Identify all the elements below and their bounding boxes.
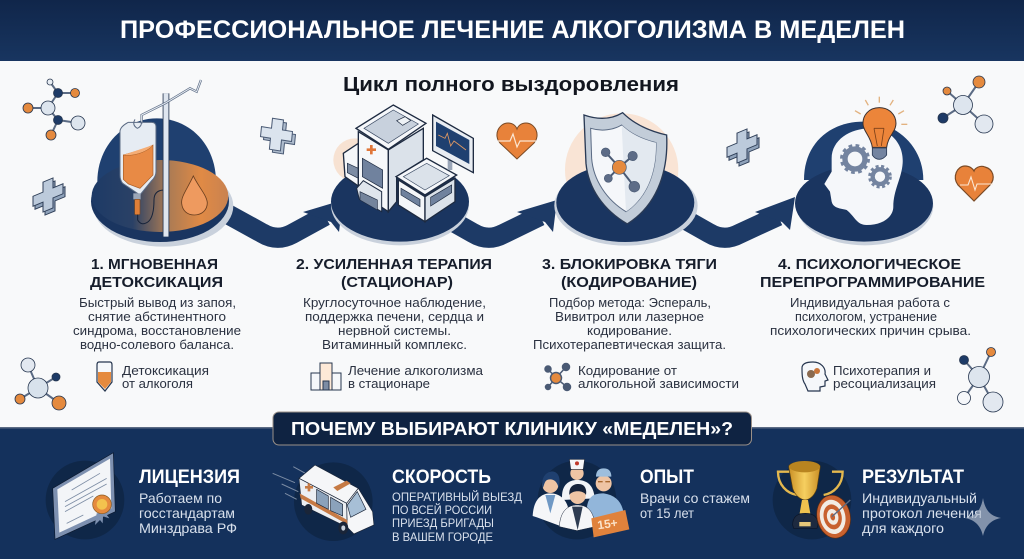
panel: why choose bbox=[0, 427, 1024, 559]
icon: target bbox=[813, 492, 854, 541]
text: step 3 description bbox=[533, 295, 726, 352]
badge: why choose heading: ПОЧЕМУ ВЫБИРАЮТ КЛИНИКУ «МЕДЕЛЕН»? bbox=[291, 419, 733, 439]
step 3 text bbox=[533, 256, 739, 391]
icon: plus centre-left bbox=[259, 117, 296, 156]
illustration: step 1 IV drip bbox=[91, 80, 233, 247]
text: speed: ОПЕРАТИВНЫЙ ВЫЕЗД bbox=[392, 489, 522, 504]
heading: step 3: (КОДИРОВАНИЕ) bbox=[561, 274, 697, 291]
step 2 text bbox=[296, 256, 492, 391]
heading: step 1: 1. МГНОВЕННАЯ bbox=[91, 256, 218, 273]
icon: ambulance bbox=[273, 462, 374, 541]
icon: molecule bottom right bbox=[958, 348, 1003, 412]
icon: molecule on shield bbox=[601, 148, 640, 192]
heading: step 3: 3. БЛОКИРОВКА ТЯГИ bbox=[542, 256, 717, 273]
text: speed: СКОРОСТЬ bbox=[392, 467, 491, 488]
icon: licence certificate bbox=[46, 453, 124, 539]
icon: IV bag bbox=[120, 122, 156, 195]
illustration: step 3 shield bbox=[554, 113, 698, 246]
text: step 3 description: Подбор метода: Эспераль, bbox=[549, 295, 711, 310]
icon: small molecule bbox=[545, 364, 570, 390]
text: step 3 description: Вивитрол или лазерное bbox=[555, 309, 704, 324]
icon: orange drop bbox=[182, 176, 207, 215]
text: experience: ОПЫТ bbox=[640, 467, 694, 488]
text: step 2 caption bbox=[348, 363, 484, 391]
step 1 text bbox=[73, 256, 241, 391]
icon: molecule top left bbox=[23, 79, 85, 140]
text: experience: от 15 лет bbox=[640, 505, 695, 521]
illustration: step 2 hospital bbox=[331, 105, 473, 245]
text: step 1 description: водно-солевого баланса. bbox=[80, 337, 234, 352]
text: step 2 description bbox=[303, 295, 486, 352]
text: licence: Минздрава РФ bbox=[139, 520, 237, 536]
text: step 4 description bbox=[770, 295, 971, 338]
text: speed: ПО ВСЕЙ РОССИИ bbox=[392, 502, 492, 517]
text: step 3 caption: Кодирование от bbox=[578, 363, 677, 378]
text: step 4 description: психологом, устранение bbox=[795, 309, 937, 324]
icon: IV pole bbox=[156, 93, 176, 237]
text: step 1 caption: Детоксикация bbox=[122, 363, 209, 378]
text: result: для каждого bbox=[862, 520, 944, 536]
icon: heart centre bbox=[497, 123, 537, 159]
text: step 2 caption: в стационаре bbox=[348, 376, 430, 391]
text: step 3 caption bbox=[578, 363, 739, 391]
text: step 1 caption: от алкоголя bbox=[122, 376, 193, 391]
text: step 3 caption: алкогольной зависимости bbox=[578, 376, 739, 391]
text: licence bbox=[139, 467, 240, 536]
icon: light bulb bbox=[855, 97, 907, 159]
text: step 1 description: Быстрый вывод из запоя, bbox=[79, 295, 236, 310]
text: step 2 description: поддержка печени, сердца и bbox=[305, 309, 484, 324]
text: step 4 caption bbox=[833, 363, 936, 391]
heading: step 2: 2. УСИЛЕННАЯ ТЕРАПИЯ bbox=[296, 256, 492, 273]
badge: 15+: 15+ bbox=[596, 516, 619, 532]
icon: plus left bbox=[33, 174, 65, 219]
icon: molecule bottom left bbox=[15, 358, 66, 410]
text: step 4 caption: ресоциализация bbox=[833, 376, 936, 391]
icon: molecule top right bbox=[938, 76, 993, 133]
text: step 4 description: психологических причин срыва. bbox=[770, 323, 971, 338]
text: step 1 caption bbox=[122, 363, 209, 391]
text: speed: В ВАШЕМ ГОРОДЕ bbox=[392, 530, 493, 544]
text: result: РЕЗУЛЬТАТ bbox=[862, 467, 964, 488]
text: step 1 description: снятие абстинентного bbox=[88, 309, 226, 324]
text: speed bbox=[392, 467, 522, 544]
icon: sparkle star bbox=[965, 498, 1001, 536]
text: step 2 caption: Лечение алкоголизма bbox=[348, 363, 484, 378]
icon: gears bbox=[842, 146, 890, 187]
text: step 2 description: Круглосуточное наблюдение, bbox=[303, 295, 486, 310]
heading: step 1: ДЕТОКСИКАЦИЯ bbox=[90, 274, 223, 291]
icon: heart right bbox=[955, 166, 993, 201]
header banner bbox=[0, 0, 1024, 61]
text: licence: Работаем по bbox=[139, 490, 222, 506]
arrow: step 1 to step 2 bbox=[222, 200, 343, 238]
icon: doctors team bbox=[533, 459, 629, 539]
text: licence: ЛИЦЕНЗИЯ bbox=[139, 467, 240, 488]
text: step 4 description: Индивидуальная работа с bbox=[790, 295, 950, 310]
text: step 2 description: нервной системы. bbox=[338, 323, 451, 338]
text: step 1 description: синдрома, восстановление bbox=[73, 323, 241, 338]
icon: small head bbox=[802, 362, 828, 391]
arrow: step 3 to step 4 bbox=[686, 197, 795, 238]
text: step 2 description: Витаминный комплекс. bbox=[322, 337, 467, 352]
heading: step 3 bbox=[542, 256, 717, 291]
arrow: step 2 to step 3 bbox=[450, 200, 557, 238]
heading: step 4 bbox=[760, 256, 985, 291]
text: step 3 description: Психотерапевтическая защита. bbox=[533, 337, 726, 352]
badge: why choose heading bbox=[273, 412, 752, 445]
step 4 text bbox=[760, 256, 985, 391]
heading: step 2: (СТАЦИОНАР) bbox=[341, 274, 453, 291]
icon: monitor bbox=[433, 115, 473, 173]
icon: small IV bag bbox=[97, 362, 112, 391]
icon: plus right bbox=[727, 125, 759, 170]
heading: step 2 bbox=[296, 256, 492, 291]
text: licence: госстандартам bbox=[139, 505, 235, 521]
heading: step 4: ПЕРЕПРОГРАММИРОВАНИЕ bbox=[760, 274, 985, 291]
text: result bbox=[862, 467, 982, 536]
subtitle: Цикл полного выздоровления bbox=[343, 74, 679, 96]
text: step 4 caption: Психотерапия и bbox=[833, 363, 931, 378]
heading: step 1 bbox=[90, 256, 223, 291]
icon: trophy and target bbox=[773, 461, 854, 541]
text: step 1 description bbox=[73, 295, 241, 352]
text: experience: Врачи со стажем bbox=[640, 490, 750, 506]
text: step 3 description: кодирование. bbox=[587, 323, 672, 338]
icon: small hospital bbox=[311, 363, 341, 390]
text: experience bbox=[640, 467, 750, 521]
text: speed: ПРИЕЗД БРИГАДЫ bbox=[392, 516, 494, 530]
heading: step 4: 4. ПСИХОЛОГИЧЕСКОЕ bbox=[778, 256, 961, 273]
text: result: Индивидуальный bbox=[862, 490, 977, 506]
text: result: протокол лечения bbox=[862, 505, 982, 521]
illustration: step 4 head and bulb bbox=[795, 97, 933, 245]
title: ПРОФЕССИОНАЛЬНОЕ ЛЕЧЕНИЕ АЛКОГОЛИЗМА В МЕДЕЛЕН bbox=[120, 16, 905, 44]
